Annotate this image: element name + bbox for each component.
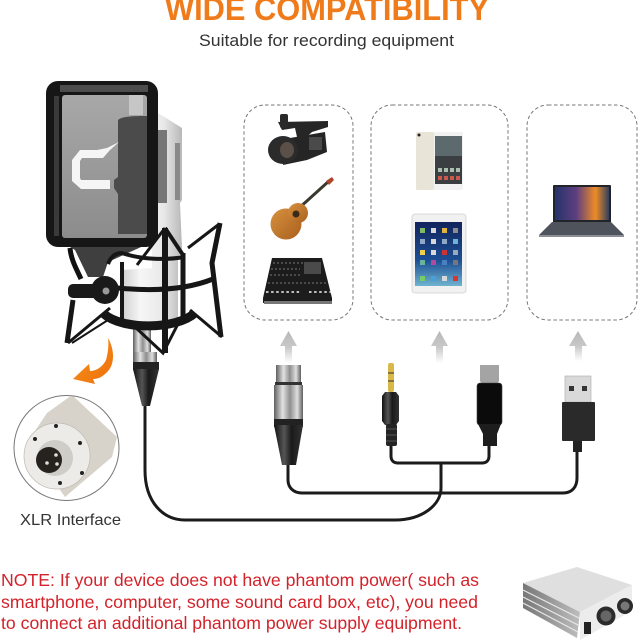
cable: microphone to splitter xyxy=(145,405,441,520)
arrow: up to camera panel xyxy=(280,331,297,363)
microphone xyxy=(46,81,222,406)
pop filter xyxy=(46,81,158,279)
panel: camera, guitar and mixer xyxy=(244,105,353,320)
icon: audio mixer xyxy=(263,258,332,304)
note text xyxy=(1,570,479,633)
icon: laptop xyxy=(539,185,624,237)
connector: USB-A xyxy=(562,376,595,452)
connector: XLR female xyxy=(274,365,303,465)
icon: acoustic guitar xyxy=(270,177,334,240)
subtitle: Suitable for recording equipment xyxy=(199,31,454,50)
arrow: up to phone panel xyxy=(431,331,448,363)
icon: smartphone xyxy=(416,132,463,190)
icon: video camera xyxy=(268,114,328,165)
mic stem and plug xyxy=(133,325,159,406)
logo xyxy=(72,142,119,189)
mic head seen through filter xyxy=(114,116,147,234)
label: XLR Interface: XLR Interface xyxy=(20,512,121,529)
shock mount xyxy=(67,223,222,353)
callout: XLR interface detail xyxy=(14,395,119,500)
note text: NOTE: If your device does not have phantom power( such as xyxy=(1,570,479,590)
note text: smartphone, computer, some sound card box, etc), you need xyxy=(1,592,478,612)
mount knob xyxy=(68,276,119,304)
connector: USB-C xyxy=(477,365,502,446)
panel: phone and tablet xyxy=(371,105,508,320)
icon: phantom power supply box xyxy=(523,567,633,640)
cable: 3.5mm and USB-C branch xyxy=(391,445,489,463)
cable: XLR female to USB xyxy=(288,450,577,493)
arrow: up to laptop panel xyxy=(569,331,587,361)
mic body xyxy=(122,110,182,322)
panel: laptop xyxy=(527,105,637,320)
icon: orange curved arrow xyxy=(73,338,113,384)
connector: 3.5mm jack xyxy=(382,363,399,446)
note text: to connect an additional phantom power supply equipment. xyxy=(1,613,462,633)
icon: tablet xyxy=(412,214,466,293)
